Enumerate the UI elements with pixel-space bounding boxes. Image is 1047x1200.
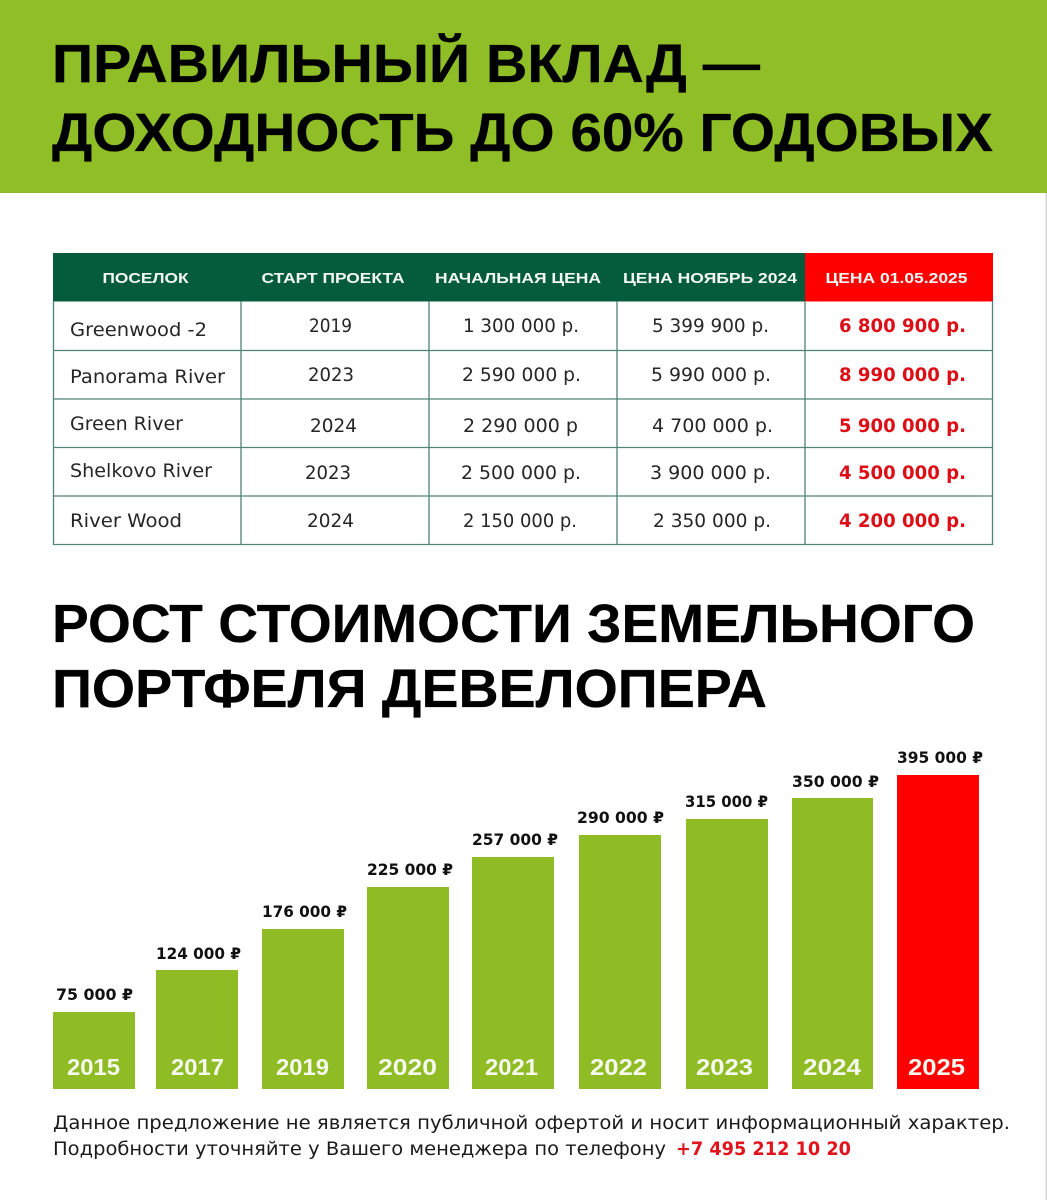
bar 2021 [472,830,558,1089]
section heading: ПОРТФЕЛЯ ДЕВЕЛОПЕРА [52,659,767,719]
bar 2025: 2025 [908,1054,965,1080]
table header: ПОСЕЛОК [102,270,189,287]
bar chart [53,748,983,1089]
row: Green River: 4 700 000 р. [652,415,773,437]
disclaimer: Подробности уточняйте у Вашего менеджера по телефону [53,1138,666,1160]
table header: НАЧАЛЬНАЯ ЦЕНА [435,270,601,287]
price table [53,253,993,544]
row: Shelkovo River: Shelkovo River [70,460,212,482]
bar 2022: 2022 [590,1054,647,1080]
row: Green River: Green River [70,413,183,435]
bar 2020: 2020 [378,1054,437,1080]
table header: ЦЕНА НОЯБРЬ 2024 [623,270,798,287]
bar 2019: 176 000 ₽ [262,902,347,921]
row: River Wood [70,510,966,532]
row: Greenwood -2: 6 800 900 р. [839,315,966,337]
row: Green River: 2 290 000 р [463,415,578,437]
row: Panorama River: 2023 [308,364,354,386]
row: Green River: 2024 [310,415,357,437]
section heading [52,594,975,719]
bar 2021: 257 000 ₽ [472,830,558,849]
row: Panorama River: 2 590 000 р. [462,364,581,386]
bar 2024: 2024 [803,1054,861,1080]
row: Panorama River: 5 990 000 р. [651,364,771,386]
disclaimer [53,1112,1010,1160]
row: Greenwood -2: Greenwood -2 [70,319,207,341]
bar 2025: 395 000 ₽ [897,748,983,767]
row: River Wood: 2 150 000 р. [463,510,577,532]
row: River Wood: 2 350 000 р. [653,510,771,532]
title line 2: ДОХОДНОСТЬ ДО 60% ГОДОВЫХ [52,103,993,163]
bar 2015: 2015 [67,1054,120,1080]
phone number: +7 495 212 10 20 [676,1138,851,1160]
title line 1: ПРАВИЛЬНЫЙ ВКЛАД — [52,33,760,94]
row: Panorama River [70,364,966,388]
bar 2022: 290 000 ₽ [577,808,664,827]
row: Panorama River: Panorama River [70,366,225,388]
row: Panorama River: 8 990 000 р. [839,364,966,386]
bar 2020: 225 000 ₽ [367,860,453,879]
bar 2015 [53,985,135,1089]
disclaimer: Данное предложение не является публичной офертой и носит информационный характер. [53,1112,1010,1134]
bar 2024 [792,772,879,1089]
bar 2021: 2021 [485,1054,538,1080]
row: Shelkovo River: 3 900 000 р. [650,462,771,484]
bar 2022 [577,808,664,1089]
table header [53,253,993,302]
bar 2019 [262,902,347,1089]
row: River Wood: 2024 [307,510,354,532]
row: Greenwood -2 [70,315,966,341]
row: Greenwood -2: 1 300 000 р. [463,315,579,337]
row: Green River [70,413,966,437]
bar 2017: 2017 [171,1054,224,1080]
section heading: РОСТ СТОИМОСТИ ЗЕМЕЛЬНОГО [52,594,975,654]
bar 2023 [685,792,768,1089]
table header: ЦЕНА 01.05.2025 [826,270,968,287]
bar 2015: 75 000 ₽ [56,985,133,1004]
row: Shelkovo River [70,460,966,484]
bar 2023: 315 000 ₽ [685,792,768,811]
table header: СТАРТ ПРОЕКТА [262,270,405,287]
row: Greenwood -2: 5 399 900 р. [652,315,769,337]
row: Shelkovo River: 4 500 000 р. [839,462,966,484]
table grid [53,301,993,544]
row: Shelkovo River: 2 500 000 р. [461,462,581,484]
bar 2024: 350 000 ₽ [792,772,879,791]
bar 2025 [897,748,983,1089]
title banner [0,0,1047,193]
bar 2023: 2023 [696,1054,753,1080]
bar 2017 [156,944,241,1089]
row: Green River: 5 900 000 р. [839,415,966,437]
bar 2020 [367,860,453,1089]
row: River Wood: River Wood [70,510,182,532]
bar 2019: 2019 [276,1054,329,1080]
row: Greenwood -2: 2019 [309,315,352,337]
row: River Wood: 4 200 000 р. [839,510,966,532]
row: Shelkovo River: 2023 [305,462,351,484]
bar 2017: 124 000 ₽ [156,944,241,963]
